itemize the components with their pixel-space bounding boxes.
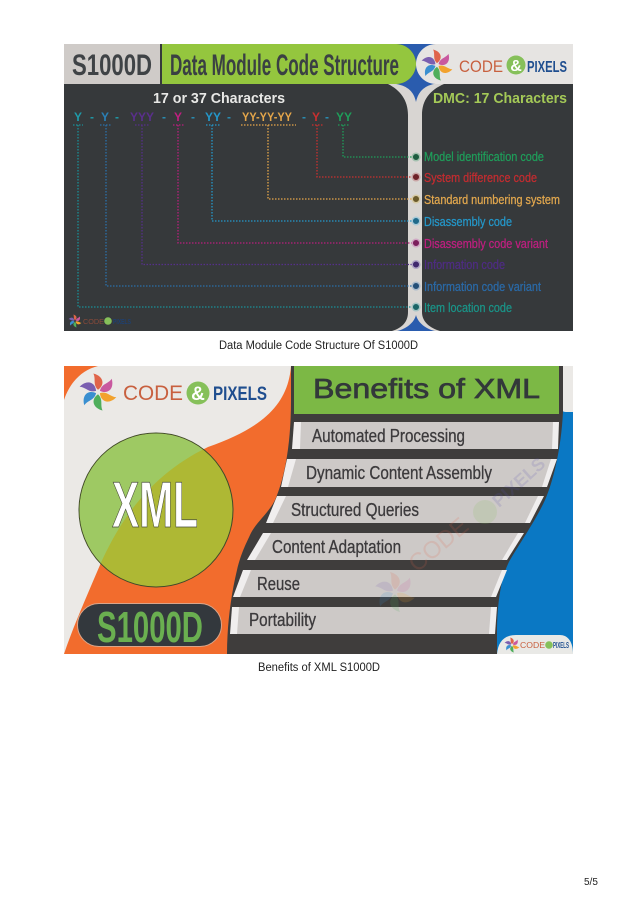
code segments: - — [302, 110, 306, 124]
small logo — [69, 314, 131, 328]
code segments: YY — [336, 110, 352, 124]
caption: data module code structure: Data Module Code Structure Of S1000D — [219, 340, 418, 352]
code labels: Information code — [424, 257, 505, 272]
header: title — [160, 44, 416, 84]
caption: benefits of XML: Benefits of XML S1000D — [258, 662, 380, 674]
panel: data module code structure — [64, 44, 573, 331]
row: content adaptation: Content Adaptation — [272, 537, 401, 557]
logo: code and pixels — [416, 44, 573, 84]
blue connector top — [396, 44, 434, 102]
row: content adaptation — [247, 533, 524, 560]
code labels: Disassembly code variant — [424, 236, 548, 251]
circle: XML — [79, 433, 233, 587]
pill: S1000D: S1000D — [97, 603, 203, 652]
row: portability: Portability — [249, 610, 316, 630]
row: automated processing — [292, 422, 559, 449]
blue connector bottom — [397, 315, 435, 331]
blue area — [480, 400, 573, 654]
code labels: System difference code — [424, 170, 537, 185]
code segments: - — [227, 110, 231, 124]
code segments: - — [90, 110, 94, 124]
panel: benefits of XML — [64, 366, 573, 654]
small logo: PIXELS — [113, 317, 131, 326]
logo: bottom right badge — [497, 635, 573, 654]
page — [64, 44, 598, 885]
center divider — [388, 84, 444, 331]
dark ribbon — [227, 366, 563, 654]
code labels: Disassembly code — [424, 214, 512, 229]
logo: code and pixels: PIXELS — [527, 59, 567, 76]
header: title: Data Module Code Structure — [170, 49, 399, 82]
light background — [64, 366, 291, 654]
row: reuse — [233, 570, 507, 597]
code segments: - — [115, 110, 119, 124]
connector dots — [412, 153, 420, 311]
dotted connector lines — [73, 125, 412, 307]
logo: bottom right badge: PIXELS — [553, 641, 569, 650]
pill: S1000D — [78, 603, 222, 652]
logo: top left: & — [191, 384, 205, 405]
row: automated processing: Automated Processing — [312, 426, 465, 446]
watermark — [375, 453, 549, 612]
logo: bottom right badge: CODE — [520, 641, 545, 650]
code segments: YYY — [130, 110, 154, 124]
row: structured queries — [266, 496, 544, 523]
code labels — [424, 149, 560, 315]
code segments — [74, 110, 352, 124]
heading band: benefits of XML: Benefits of XML — [313, 373, 540, 404]
small logo: CODE — [83, 317, 104, 326]
logo: top left: PIXELS — [213, 383, 267, 405]
code labels: Information code variant — [424, 279, 541, 294]
heading: DMC 17 characters: DMC: 17 Characters — [433, 91, 567, 107]
header: S1000D: S1000D — [72, 49, 152, 82]
logo: top left: CODE — [123, 382, 183, 405]
circle: XML: XML — [112, 468, 198, 541]
page number: 5/5 — [584, 877, 598, 888]
heading band: benefits of XML — [294, 366, 559, 414]
code segments: Y — [74, 110, 82, 124]
code segments: Y — [101, 110, 109, 124]
row: dynamic content assembly — [281, 459, 557, 487]
code segments: - — [162, 110, 166, 124]
logo: top left — [80, 374, 267, 410]
logo: code and pixels: CODE — [459, 57, 503, 76]
heading: 17 or 37 characters: 17 or 37 Characters — [153, 91, 285, 107]
row: dynamic content assembly: Dynamic Content Assembly — [306, 463, 492, 483]
code segments: YY — [205, 110, 221, 124]
header: S1000D — [64, 44, 160, 84]
code labels: Item location code — [424, 300, 512, 315]
code labels: Model identification code — [424, 149, 544, 164]
watermark: PIXELS — [488, 453, 549, 511]
top right light corner — [558, 366, 573, 412]
row: structured queries: Structured Queries — [291, 500, 419, 520]
row: reuse: Reuse — [257, 574, 300, 594]
watermark: CODE — [404, 512, 474, 578]
code segments: - — [191, 110, 195, 124]
code segments: - — [325, 110, 329, 124]
code labels: Standard numbering system — [424, 192, 560, 207]
code segments: Y — [312, 110, 320, 124]
code segments: YY-YY-YY — [242, 110, 292, 124]
code segments: Y — [174, 110, 182, 124]
row: portability — [230, 607, 497, 634]
logo: code and pixels: & — [510, 58, 522, 75]
